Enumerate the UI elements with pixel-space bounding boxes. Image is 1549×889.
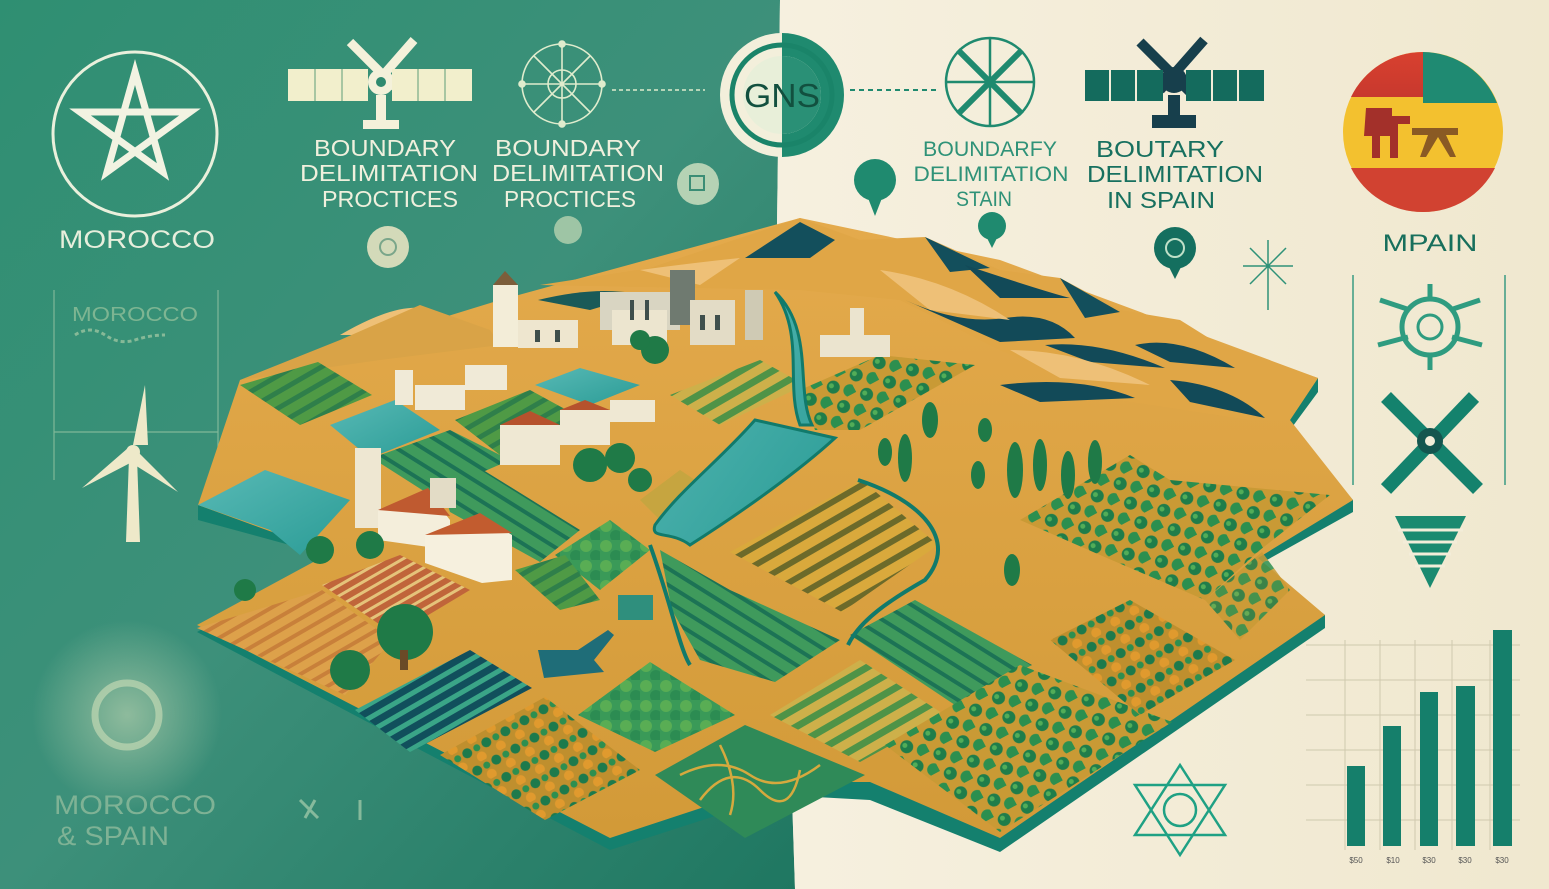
river	[654, 292, 835, 545]
map thickness edge	[197, 378, 1353, 852]
fields: left side	[197, 355, 975, 838]
scattered trees	[234, 330, 1102, 690]
Morocco label: MOROCCO	[59, 226, 215, 254]
icon: sun marker	[1243, 240, 1293, 310]
heading: boundary delimitation Spain 1: DELIMITATION	[914, 163, 1068, 186]
heading: boundary delimitation Spain 2: IN SPAIN	[1107, 187, 1215, 213]
bar chart: $30	[1422, 856, 1436, 865]
land base	[197, 218, 1353, 838]
Morocco and Spain label: MOROCCO	[54, 790, 216, 820]
icon: network wheel right	[946, 38, 1034, 126]
icon: network globe left	[519, 41, 605, 127]
tractor	[538, 630, 614, 678]
Morocco emblem	[53, 52, 217, 216]
faint Morocco sketch panel	[54, 290, 218, 480]
icon: satellite left	[288, 40, 472, 129]
bar chart: $10	[1386, 856, 1400, 865]
icon: small marks lower left	[300, 800, 360, 820]
side rules	[1353, 275, 1505, 485]
heading: boundary delimitation Spain 1: STAIN	[956, 188, 1012, 211]
icon: satellite right	[1085, 40, 1264, 128]
faint emblem	[32, 620, 222, 810]
background: Morocco green half	[0, 0, 795, 889]
map: isometric land	[197, 218, 1353, 852]
background: Spain cream half	[776, 0, 1549, 889]
Spain label: MPAIN	[1382, 230, 1478, 257]
heading: boundary delimitation Spain 1: BOUNDARFY	[923, 138, 1057, 161]
faint Morocco sketch panel: MOROCCO	[72, 304, 198, 326]
icon: wind turbine	[82, 385, 178, 542]
heading: boundary delimitation practices 2: DELIMITATION	[492, 160, 664, 186]
icon: cross	[1386, 397, 1478, 489]
bar chart	[1306, 630, 1520, 865]
fields: centre and right	[660, 455, 1330, 832]
Spain flag badge	[1343, 52, 1503, 212]
heading: boundary delimitation practices 1: BOUNDARY	[314, 135, 456, 161]
icon: green gear emblem	[1378, 284, 1482, 370]
bar chart: $30	[1495, 856, 1509, 865]
villages	[355, 270, 890, 620]
connector arrow from GNS	[850, 89, 940, 91]
heading: boundary delimitation Spain 2: BOUTARY	[1096, 136, 1224, 162]
GNS badge	[720, 33, 844, 157]
heading: boundary delimitation practices 1: PROCTICES	[322, 186, 458, 212]
bar chart: $50	[1349, 856, 1363, 865]
icon: atom	[1135, 765, 1225, 855]
heading: boundary delimitation practices 2: BOUNDARY	[495, 135, 641, 161]
location pins	[367, 159, 1196, 279]
desert dunes	[240, 218, 1318, 420]
heading: boundary delimitation practices 2: PROCTICES	[504, 186, 636, 212]
river lower channel	[650, 480, 938, 665]
bar chart: $30	[1458, 856, 1472, 865]
icon: funnel	[1395, 516, 1466, 588]
connector arrow to GNS	[612, 89, 705, 91]
Morocco and Spain label: & SPAIN	[57, 821, 169, 851]
heading: boundary delimitation Spain 2: DELIMITATION	[1087, 161, 1263, 187]
heading: boundary delimitation practices 1: DELIMITATION	[300, 160, 478, 186]
GNS badge: GNS	[744, 77, 820, 114]
